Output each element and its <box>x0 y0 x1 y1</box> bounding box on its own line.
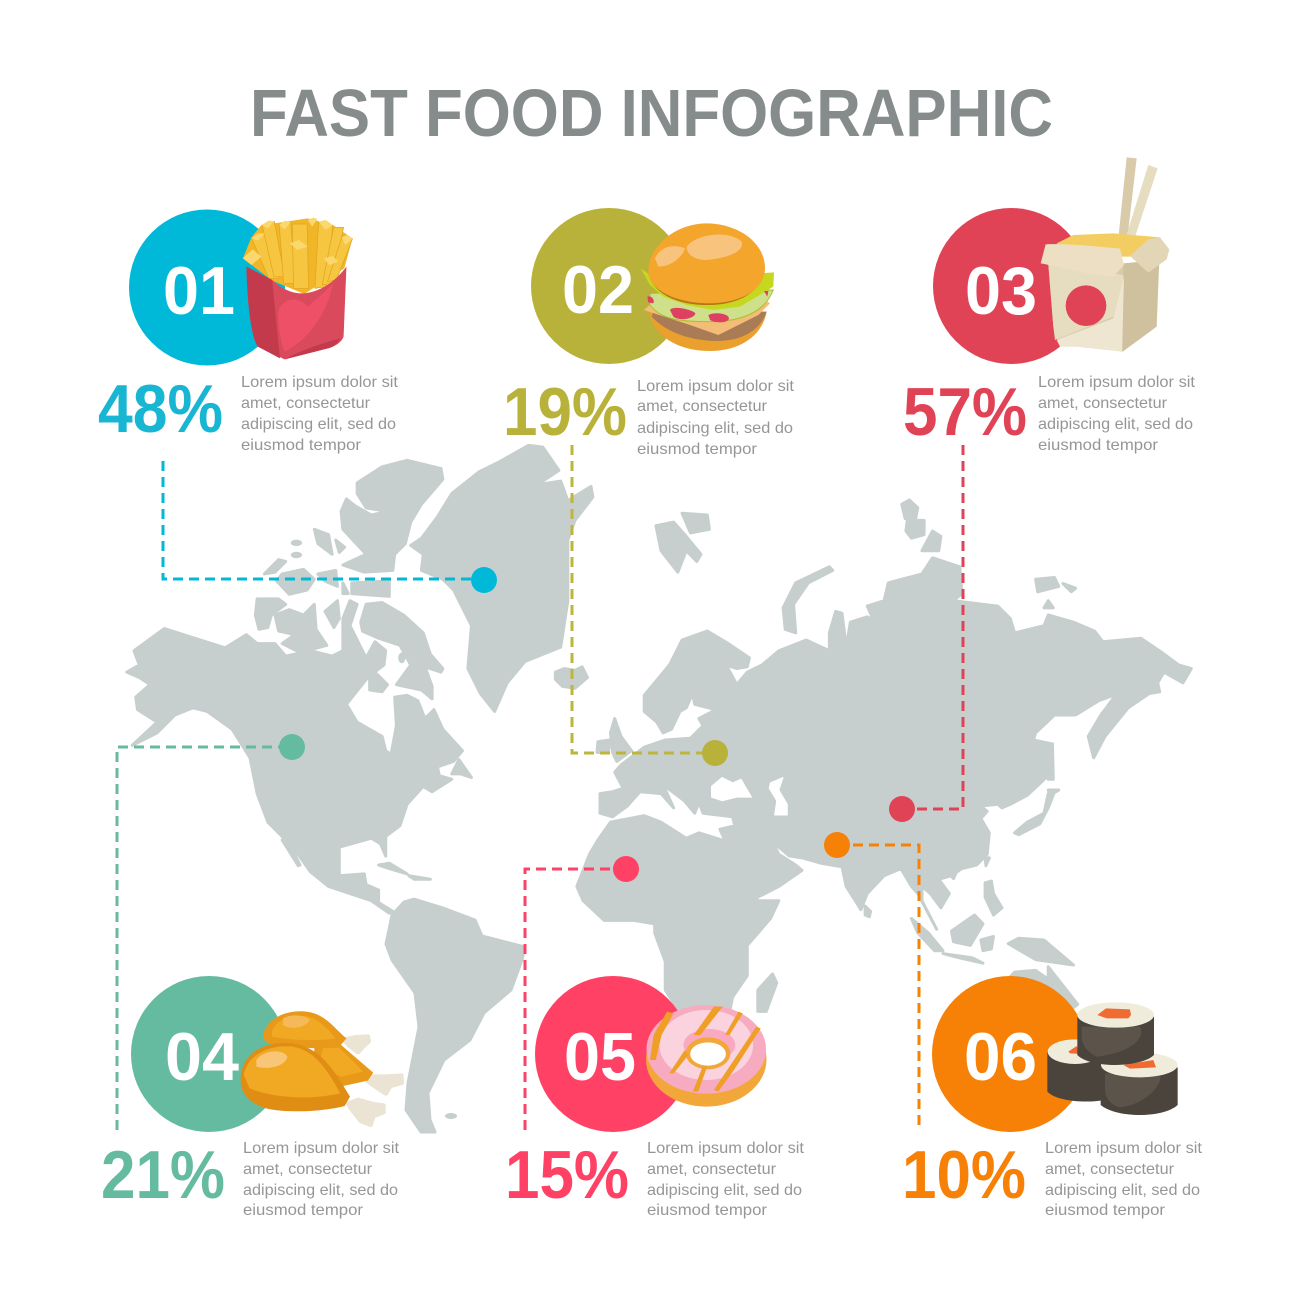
map: South America <box>386 899 525 1132</box>
description 05: amet, consectetur <box>647 1161 777 1178</box>
badge 01 <box>129 210 285 366</box>
badge 02 <box>531 208 687 364</box>
description 01: adipiscing elit, sed do <box>241 416 396 433</box>
connector 03 <box>902 445 963 809</box>
badge number 04: 04 <box>165 1019 239 1095</box>
description 04: Lorem ipsum dolor sit <box>243 1140 400 1157</box>
map marker 02 <box>702 740 728 766</box>
description 03: adipiscing elit, sed do <box>1038 416 1193 433</box>
badge number 02: 02 <box>562 252 634 328</box>
description 04: adipiscing elit, sed do <box>243 1182 398 1199</box>
description 02: Lorem ipsum dolor sit <box>637 378 795 395</box>
badge number 03: 03 <box>965 253 1037 329</box>
description 03: eiusmod tempor <box>1038 437 1159 454</box>
panel: 06 sushi <box>902 976 1203 1219</box>
connector 06 <box>837 845 919 1125</box>
description 03: Lorem ipsum dolor sit <box>1038 374 1196 391</box>
map marker 01 <box>471 567 497 593</box>
description 05: eiusmod tempor <box>647 1202 768 1219</box>
map marker 03 <box>889 796 915 822</box>
description 02: amet, consectetur <box>637 398 768 415</box>
map marker 06 <box>824 832 850 858</box>
description 02 <box>637 378 795 458</box>
percentage 10%: 10% <box>902 1137 1026 1213</box>
panel: 04 chicken <box>101 976 402 1219</box>
badge 03 <box>933 208 1089 364</box>
description 02: eiusmod tempor <box>637 441 758 458</box>
connector 02 <box>572 445 714 753</box>
percentage 48%: 48% <box>98 371 223 447</box>
description 06: eiusmod tempor <box>1045 1202 1166 1219</box>
description 04 <box>243 1140 400 1219</box>
panel: 05 donut <box>505 976 805 1219</box>
description 03 <box>1038 374 1196 454</box>
description 01: Lorem ipsum dolor sit <box>241 374 399 391</box>
icon: sushi rolls <box>1047 1002 1178 1115</box>
panel: 03 noodles <box>903 157 1196 454</box>
badge 06 <box>932 976 1088 1132</box>
map: Americas and Arctic <box>127 445 593 913</box>
connector 05 <box>525 869 626 1130</box>
description 04: amet, consectetur <box>243 1161 373 1178</box>
description 06: adipiscing elit, sed do <box>1045 1182 1200 1199</box>
description 02: adipiscing elit, sed do <box>637 420 793 437</box>
icon: noodle box <box>1041 157 1169 352</box>
description 06 <box>1045 1140 1203 1219</box>
description 01: eiusmod tempor <box>241 437 362 454</box>
description 03: amet, consectetur <box>1038 395 1168 412</box>
title: FAST FOOD INFOGRAPHIC <box>250 76 1053 151</box>
badge number 01: 01 <box>163 253 235 329</box>
map marker 05 <box>613 856 639 882</box>
map: Eurasia, Africa and Oceania <box>577 500 1191 1047</box>
description 01: amet, consectetur <box>241 395 371 412</box>
connector 04 <box>117 747 292 1130</box>
badge 05 <box>535 976 691 1132</box>
icon: burger <box>641 223 774 351</box>
description 05: adipiscing elit, sed do <box>647 1182 802 1199</box>
percentage 15%: 15% <box>505 1137 629 1213</box>
badge number 06: 06 <box>964 1019 1037 1095</box>
world map <box>127 445 1191 1132</box>
description 06: amet, consectetur <box>1045 1161 1175 1178</box>
map marker 04 <box>279 734 305 760</box>
percentage 19%: 19% <box>503 374 627 450</box>
panel: 01 fries <box>98 210 399 454</box>
icon: fries <box>243 218 352 359</box>
percentage 57%: 57% <box>903 374 1027 450</box>
description 06: Lorem ipsum dolor sit <box>1045 1140 1203 1157</box>
description 01 <box>241 374 399 454</box>
badge 04 <box>131 976 287 1132</box>
panel: 02 burger <box>503 208 795 458</box>
description 05 <box>647 1140 805 1219</box>
badge number 05: 05 <box>564 1019 636 1095</box>
connector 01 <box>163 461 484 579</box>
description 05: Lorem ipsum dolor sit <box>647 1140 805 1157</box>
icon: donut <box>646 1005 767 1107</box>
description 04: eiusmod tempor <box>243 1202 364 1219</box>
map: Falkland Islands <box>445 1113 457 1119</box>
icon: chicken legs <box>241 1011 402 1125</box>
percentage 21%: 21% <box>101 1137 225 1213</box>
